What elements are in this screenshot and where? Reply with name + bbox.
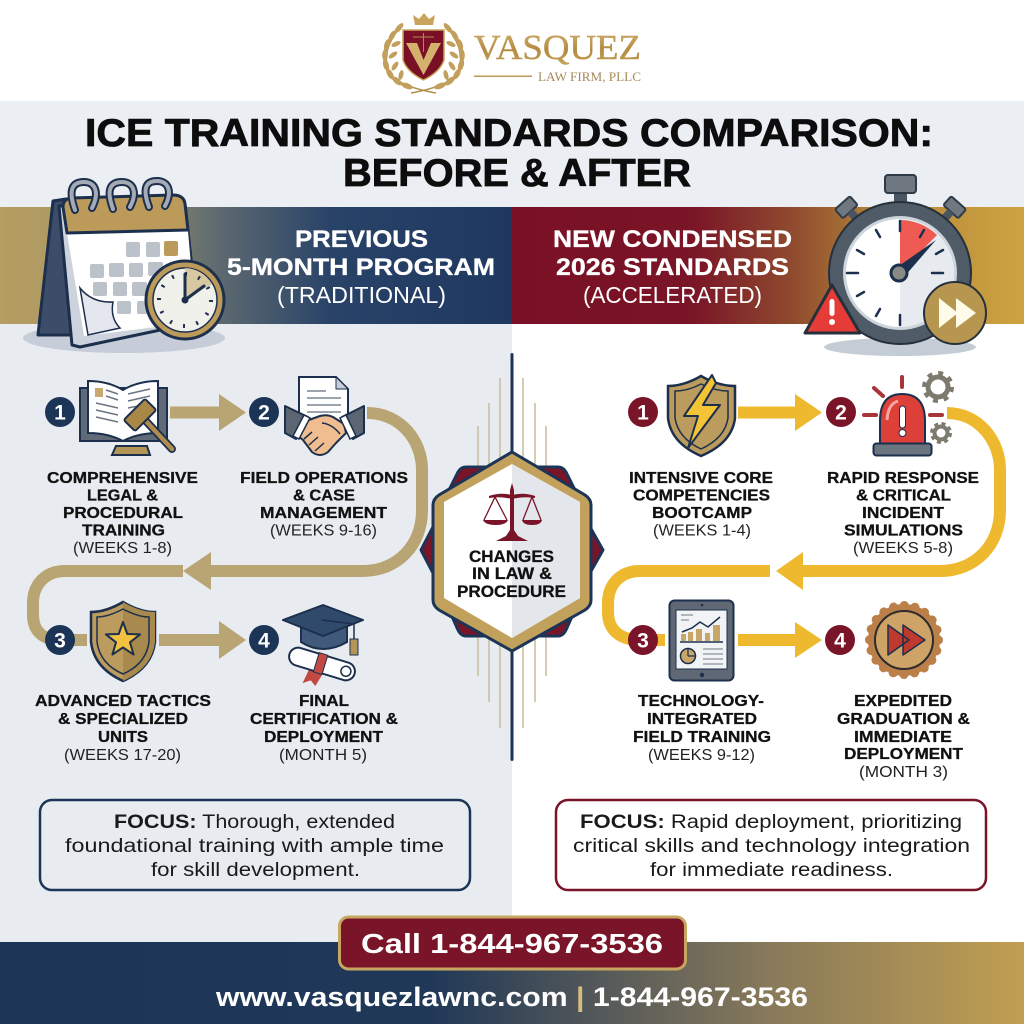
number badge 2 [826,397,856,427]
number badge 2 [249,397,279,427]
step label: (WEEKS 9-16) [270,522,377,540]
step label: COMPREHENSIVE [47,470,198,487]
callout: new focus [556,800,986,890]
panel background: left [0,324,512,944]
badge face shade [512,464,580,638]
heading: previous program: 5-MONTH PROGRAM [227,254,495,281]
logo: Vasquez Law Firm [382,13,641,93]
callout: new focus: for immediate readiness. [650,860,893,881]
step L1: comprehensive legal training [45,381,198,557]
icon: calendar with clock [23,181,225,353]
step label [827,470,979,557]
callout: new focus: FOCUS: Rapid deployment, prioritizing [580,812,962,833]
icon: stopwatch [805,175,986,356]
footer band [0,942,1024,1024]
step R2: rapid response [826,373,979,557]
step label [47,470,198,557]
number badge 4 [249,625,279,655]
number badge 2: 2 [835,402,847,424]
number badge 4 [825,625,855,655]
step label [629,470,773,540]
step R4: expedited graduation [825,604,970,781]
logo laurels [382,22,465,93]
title [85,112,933,195]
callout: previous focus [40,800,470,890]
step label: DEPLOYMENT [844,746,963,763]
logo crown [413,13,435,25]
step label: EXPEDITED [854,693,952,710]
step label: TRAINING [82,522,165,540]
step label: FIELD OPERATIONS [240,470,408,487]
step label [633,693,771,764]
footer contact: www.vasquezlawnc.com | 1-844-967-3536 [215,982,808,1012]
badge frame [433,452,591,651]
step R3: technology training [628,600,771,764]
icon: seal with fast-forward [868,604,940,676]
step label: CERTIFICATION & [250,711,398,728]
callout: previous focus: for skill development. [151,860,360,881]
icon: tablet with charts [670,600,734,680]
step label: INCIDENT [862,505,944,522]
step label: FINAL [299,693,349,710]
icon: siren and gears [864,373,952,456]
number badge 3 [45,625,75,655]
step label [837,693,970,781]
number badge 4: 4 [258,630,270,652]
step label: (WEEKS 1-4) [653,522,751,540]
number badge 3 [628,625,658,655]
step label: IMMEDIATE [854,729,952,746]
step label: INTEGRATED [647,711,757,728]
center badge: changes in law and procedure [421,452,603,651]
number badge 3: 3 [637,630,649,652]
heading: new standards: 2026 STANDARDS [556,254,789,281]
step label: GRADUATION & [837,711,970,728]
badge face [444,464,580,638]
flow arrows: left track [33,394,422,659]
step label: (WEEKS 9-12) [648,747,755,764]
badge label: IN LAW & [472,564,552,583]
heading: previous program [227,226,495,308]
step label: LEGAL & [87,488,158,504]
callout: previous focus: foundational training with ample time [65,836,444,857]
step label: INTENSIVE CORE [629,470,773,487]
number badge 1 [628,397,658,427]
badge label: PROCEDURE [457,582,566,601]
badge label [457,547,566,601]
number badge 1: 1 [54,402,66,424]
step label: SIMULATIONS [844,522,963,540]
icon: law book and gavel [80,381,172,455]
number badge 4: 4 [834,630,846,652]
step label: & SPECIALIZED [58,711,188,728]
title background [0,101,1024,207]
call button: Call 1-844-967-3536 [361,928,663,959]
callout: previous focus: FOCUS: Thorough, extended [114,812,395,833]
step label: PROCEDURAL [63,505,183,522]
page background: top [0,0,1024,101]
heading: new standards: NEW CONDENSED [553,226,792,253]
icon: scales of justice [483,483,542,541]
header band: previous program [0,207,512,324]
icon: shield with star [91,602,155,681]
number badge 3: 3 [54,630,66,652]
step label: MANAGEMENT [260,505,387,522]
step label [250,693,398,764]
logo subline: LAW FIRM, PLLC [538,69,641,84]
logo wordmark: VASQUEZ [474,28,641,67]
icon: graduation cap and diploma [282,605,363,697]
step label [240,470,408,540]
step label: (WEEKS 5-8) [853,540,953,557]
step label: BOOTCAMP [652,505,752,522]
step label: (WEEKS 1-8) [73,540,172,557]
heading: new standards [553,226,792,308]
step label: COMPETENCIES [633,488,770,504]
heading: new standards: (ACCELERATED) [583,282,762,308]
step label: ADVANCED TACTICS [35,693,211,710]
step label: UNITS [98,729,148,746]
step label: FIELD TRAINING [633,729,771,746]
header band: new standards [512,207,1024,324]
step label: & CRITICAL [856,488,951,504]
step R1: intensive bootcamp [628,375,773,540]
step label: (MONTH 5) [279,747,367,764]
step label: (WEEKS 17-20) [64,747,181,764]
icon: shield with lightning [668,375,735,456]
title: ICE TRAINING STANDARDS COMPARISON: [85,112,933,155]
step label: (MONTH 3) [859,764,948,781]
panel background: right [512,324,1024,944]
badge backing [421,467,603,636]
title: BEFORE & AFTER [343,152,691,195]
icon: document and handshake [285,377,364,455]
step L4: final certification [249,605,398,764]
number badge 2: 2 [258,402,270,424]
step label: RAPID RESPONSE [827,470,979,487]
step L2: field operations [240,377,408,540]
callout: new focus: critical skills and technology integration [573,836,970,857]
number badge 1: 1 [637,402,649,424]
number badge 1 [45,397,75,427]
logo shield [403,30,444,80]
flow arrows: right track [608,394,1000,658]
badge label: CHANGES [469,547,554,566]
step label: & CASE [293,488,355,504]
call button [340,917,686,969]
step label: TECHNOLOGY- [638,693,764,710]
logo rule [474,76,532,77]
step label [35,693,211,764]
heading: previous program: (TRADITIONAL) [277,282,446,308]
heading: previous program: PREVIOUS [295,226,428,253]
center spine [478,353,546,761]
step L3: advanced tactics [35,602,211,764]
step label: DEPLOYMENT [264,729,383,746]
